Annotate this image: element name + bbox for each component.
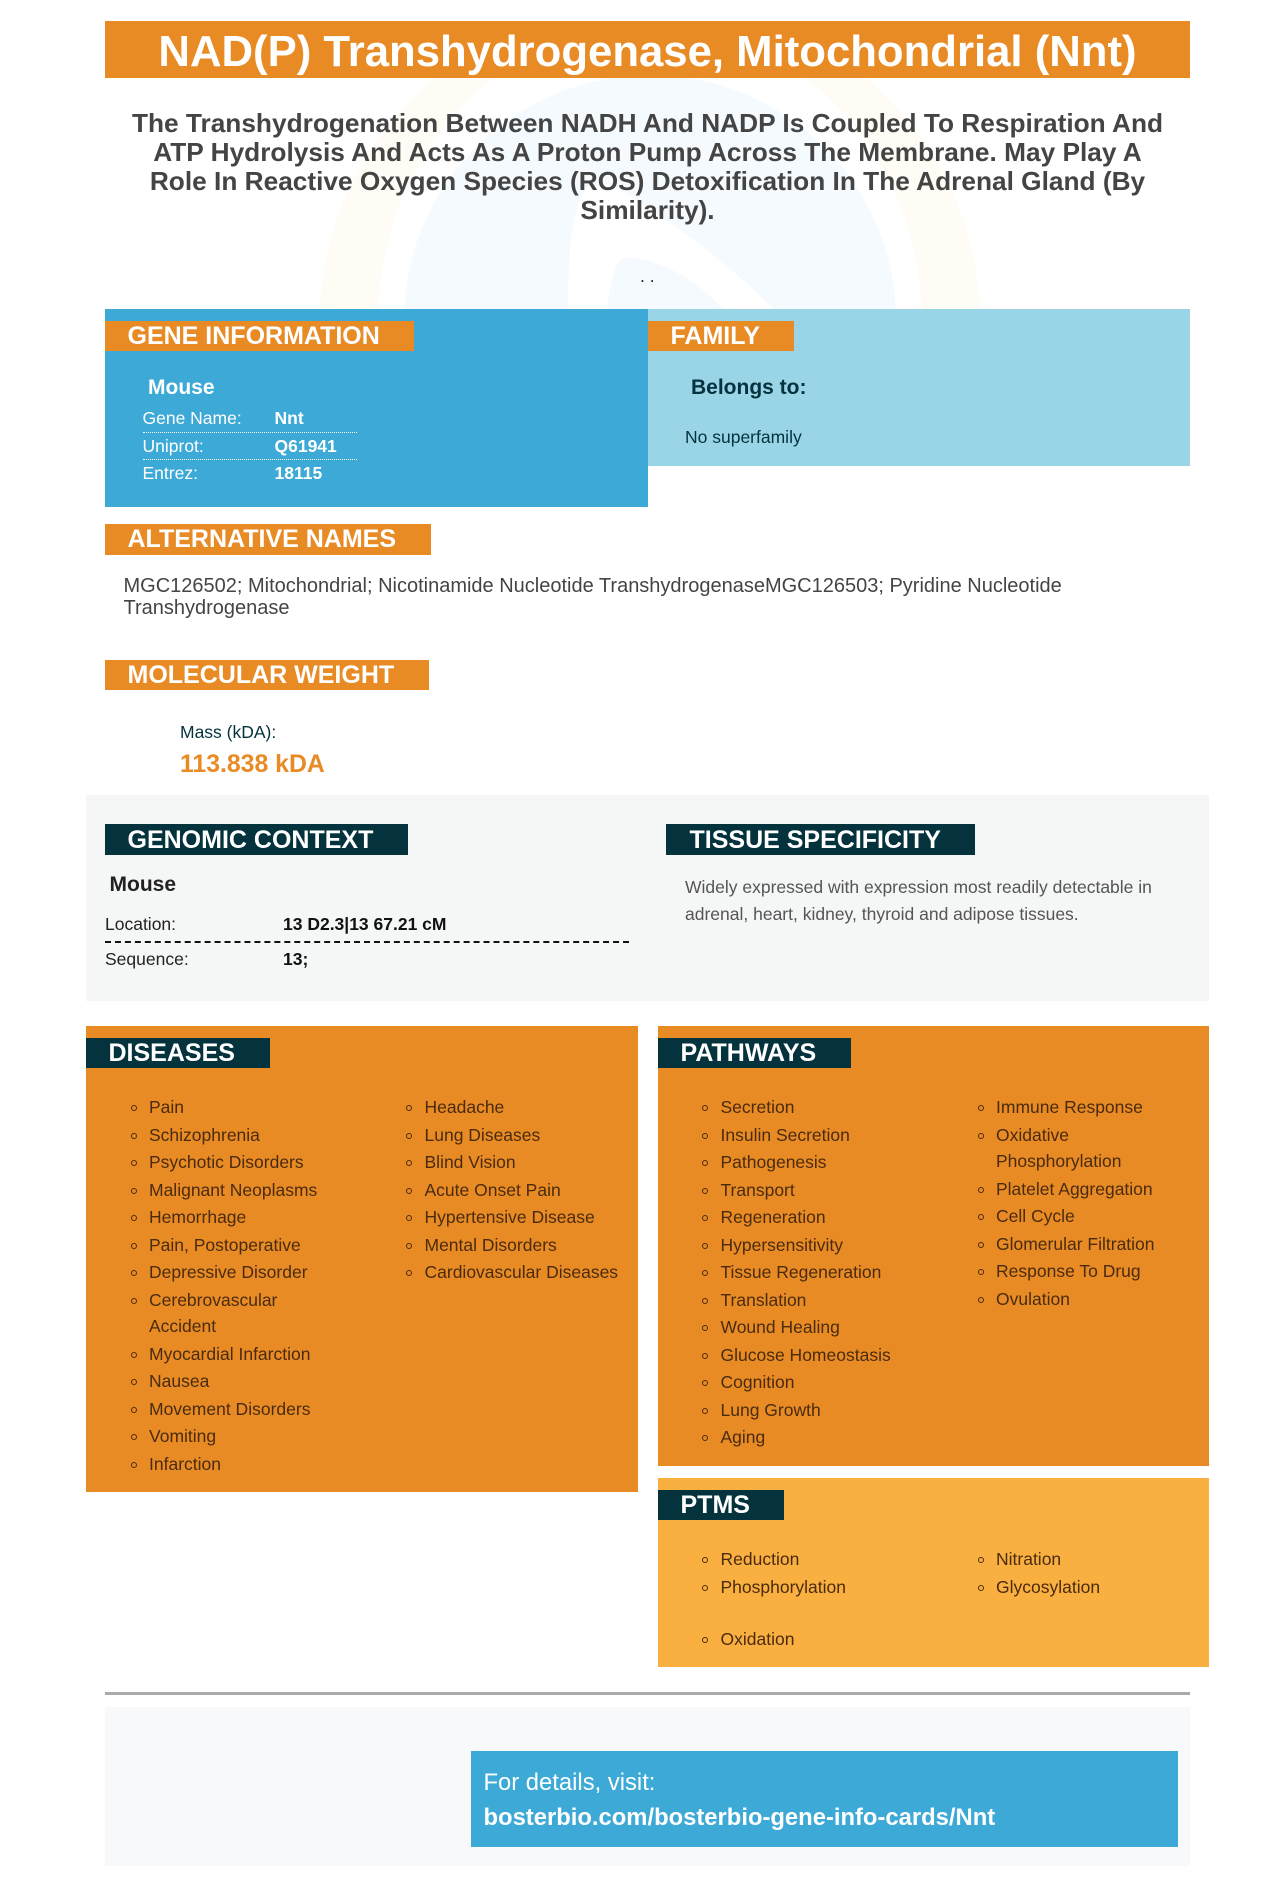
heading: gene information: GENE INFORMATION — [128, 322, 380, 350]
list: pathways column 1 — [702, 1097, 891, 1447]
superfamily text: No superfamily — [685, 427, 802, 447]
list: ptms column 1: Oxidation — [720, 1629, 794, 1649]
list: pathways column 1: Regeneration — [720, 1207, 826, 1227]
list: diseases column 2: Lung Diseases — [424, 1125, 540, 1145]
callout: details link — [470, 1751, 1178, 1847]
tissue specificity text — [685, 877, 1152, 924]
heading: genomic context: GENOMIC CONTEXT — [128, 826, 373, 854]
list: pathways column 1: Aging — [720, 1427, 765, 1447]
list: diseases column 1 — [131, 1097, 317, 1474]
list: pathways column 2: Platelet Aggregation — [996, 1179, 1153, 1199]
species label: Mouse — [110, 873, 176, 896]
mass value: 113.838 kDA — [180, 751, 325, 778]
heading: family: FAMILY — [670, 322, 760, 350]
belongs to label: Belongs to: — [691, 376, 806, 399]
panel: footer — [105, 1707, 1190, 1866]
sequence row — [105, 949, 308, 969]
panel: ptms — [658, 1478, 1209, 1667]
tissue specificity text: adrenal, heart, kidney, thyroid and adipose tissues. — [685, 904, 1079, 924]
panel: gene information — [105, 309, 648, 507]
list: diseases column 2: Hypertensive Disease — [424, 1207, 595, 1227]
list: pathways column 1: Wound Healing — [720, 1317, 840, 1337]
list: pathways column 1: Translation — [720, 1290, 806, 1310]
entrez row: Entrez: — [142, 463, 198, 483]
heading: pathways: PATHWAYS — [680, 1039, 816, 1067]
panel: genomic context and tissue specificity — [86, 795, 1209, 1001]
list: pathways column 1: Cognition — [720, 1372, 794, 1392]
uniprot row: Uniprot: — [142, 436, 204, 456]
list: pathways column 1: Secretion — [720, 1097, 794, 1117]
subtitle description: The Transhydrogenation Between NADH And NADP Is Coupled To Respiration And — [132, 108, 1163, 138]
location row: 13 D2.3|13 67.21 cM — [283, 914, 446, 934]
list: ptms column 1: Reduction — [720, 1549, 799, 1569]
heading: tissue specificity: TISSUE SPECIFICITY — [690, 826, 941, 854]
panel: diseases — [86, 1026, 638, 1492]
list: pathways column 2: Oxidative — [996, 1125, 1069, 1145]
list: diseases column 2: Blind Vision — [424, 1152, 516, 1172]
gene name row: Gene Name: — [142, 408, 242, 428]
subtitle description: Role In Reactive Oxygen Species (ROS) Detoxification In The Adrenal Gland (By — [150, 166, 1145, 196]
list: diseases column 2: Headache — [424, 1097, 504, 1117]
list: diseases column 1: Vomiting — [149, 1426, 216, 1446]
details url: bosterbio.com/bosterbio-gene-info-cards/Nnt — [484, 1804, 995, 1831]
list: diseases column 1: Cerebrovascular — [149, 1290, 277, 1310]
list: diseases column 1: Depressive Disorder — [149, 1262, 308, 1282]
list: pathways column 1: Glucose Homeostasis — [720, 1345, 891, 1365]
list: diseases column 2: Cardiovascular Diseases — [424, 1262, 618, 1282]
list: pathways column 2: Response To Drug — [996, 1261, 1141, 1281]
sequence row: Sequence: — [105, 949, 189, 969]
gene name row — [142, 407, 356, 433]
subtitle description — [132, 108, 1163, 225]
mass label: Mass (kDA): — [180, 722, 276, 742]
alternative names text — [124, 575, 1062, 619]
uniprot row: Q61941 — [274, 436, 337, 456]
heading: ptms — [658, 1490, 784, 1520]
location row: Location: — [105, 914, 176, 934]
list: pathways column 2: Glomerular Filtration — [996, 1234, 1155, 1254]
list: ptms column 2: Glycosylation — [996, 1577, 1100, 1597]
list: ptms column 2 — [978, 1549, 1100, 1597]
list: diseases column 1: Movement Disorders — [149, 1399, 310, 1419]
list: pathways column 1: Lung Growth — [720, 1400, 821, 1420]
list: pathways column 1: Transport — [720, 1180, 795, 1200]
list: diseases column 1: Myocardial Infarction — [149, 1344, 310, 1364]
list: pathways column 2: Phosphorylation — [996, 1151, 1122, 1171]
list: diseases column 1: Nausea — [149, 1371, 209, 1391]
heading: diseases: DISEASES — [108, 1039, 235, 1067]
sequence row: 13; — [283, 949, 308, 969]
heading: ptms: PTMS — [680, 1491, 750, 1519]
list: pathways column 2: Cell Cycle — [996, 1206, 1075, 1226]
list: ptms column 1: Phosphorylation — [720, 1577, 846, 1597]
list: pathways column 2: Immune Response — [996, 1097, 1143, 1117]
heading: family — [648, 321, 794, 351]
list: ptms column 2: Nitration — [996, 1549, 1061, 1569]
panel: pathways — [658, 1026, 1209, 1466]
list: ptms column 1 — [702, 1549, 846, 1649]
list: diseases column 2: Acute Onset Pain — [424, 1180, 561, 1200]
list: diseases column 1: Malignant Neoplasms — [149, 1180, 317, 1200]
list: pathways column 2 — [978, 1097, 1155, 1309]
heading: pathways — [658, 1038, 851, 1068]
location row — [105, 913, 629, 943]
list: pathways column 1: Hypersensitivity — [720, 1235, 843, 1255]
list: pathways column 2: Ovulation — [996, 1289, 1070, 1309]
alternative names text: Transhydrogenase — [124, 597, 290, 619]
list: diseases column 1: Psychotic Disorders — [149, 1152, 304, 1172]
details label: For details, visit: — [484, 1769, 655, 1796]
tissue specificity text: Widely expressed with expression most readily detectable in — [685, 877, 1152, 897]
list: pathways column 1: Insulin Secretion — [720, 1125, 850, 1145]
subtitle description: ATP Hydrolysis And Acts As A Proton Pump Across The Membrane. May Play A — [153, 137, 1142, 167]
list: diseases column 1: Schizophrenia — [149, 1125, 260, 1145]
entrez row — [142, 463, 322, 483]
list: diseases column 1: Accident — [149, 1316, 216, 1336]
list: pathways column 1: Pathogenesis — [720, 1152, 827, 1172]
divider — [105, 1692, 1190, 1695]
title: NAD(P) Transhydrogenase, Mitochondrial (Nnt) — [158, 27, 1137, 76]
list: diseases column 2 — [406, 1097, 618, 1282]
heading: diseases — [86, 1038, 270, 1068]
list: diseases column 1: Hemorrhage — [149, 1207, 246, 1227]
background watermark logo — [320, 78, 980, 309]
list: diseases column 1: Pain, Postoperative — [149, 1235, 301, 1255]
list: diseases column 1: Infarction — [149, 1454, 221, 1474]
uniprot row — [142, 434, 356, 460]
heading: molecular weight: MOLECULAR WEIGHT — [128, 661, 394, 689]
separator dots: . . — [640, 266, 655, 286]
panel: family — [648, 309, 1190, 466]
list: diseases column 1: Pain — [149, 1097, 184, 1117]
subtitle description: Similarity). — [580, 195, 715, 225]
list: diseases column 2: Mental Disorders — [424, 1235, 557, 1255]
alternative names text: MGC126502; Mitochondrial; Nicotinamide Nucleotide TranshydrogenaseMGC126503; Pyridine Nucleotide — [124, 575, 1062, 597]
entrez row: 18115 — [274, 463, 322, 483]
heading: alternative names: ALTERNATIVE NAMES — [128, 525, 396, 553]
gene name row: Nnt — [274, 408, 304, 428]
species label: Mouse — [148, 376, 215, 399]
list: pathways column 1: Tissue Regeneration — [720, 1262, 881, 1282]
